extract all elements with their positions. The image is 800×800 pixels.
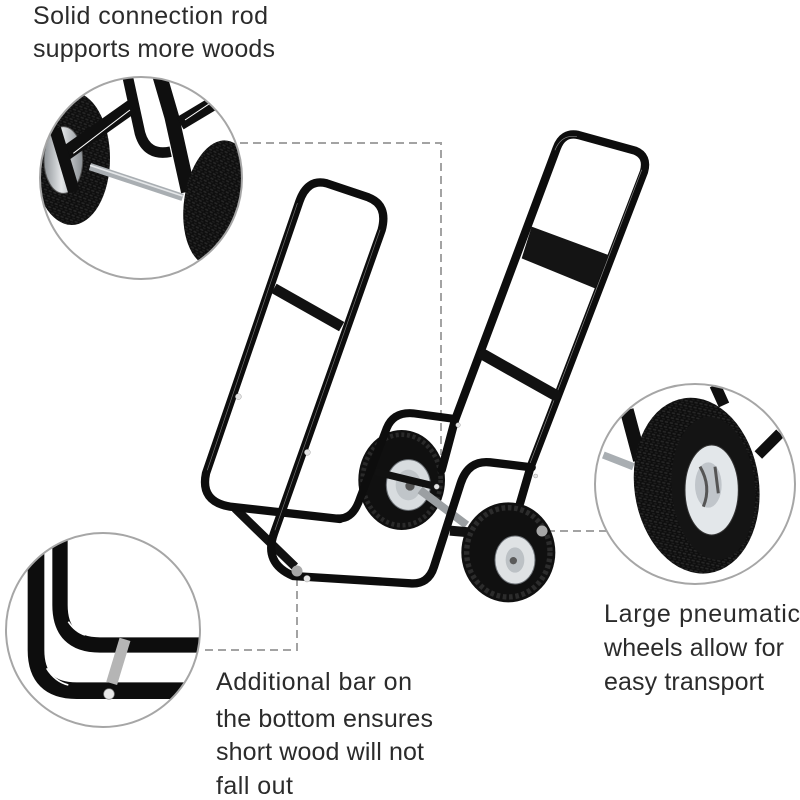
bolt [104,689,114,699]
rear wheel [358,430,445,530]
caption: bottom bar: short wood will not [216,738,424,766]
main product: log cart [205,134,645,602]
caption: connection rod: supports more woods [33,35,275,63]
tube highlights [47,622,85,685]
detail circle outline: connection rod [40,77,242,279]
caption: connection rod [33,2,275,63]
back frame front hoop [337,413,455,518]
connector: bottom dashed leader [200,578,297,650]
caption: pneumatic wheels [603,600,800,696]
detail circle: connection rod [33,77,261,271]
detail circle outline: pneumatic wheel [595,384,795,584]
connection rod [90,167,183,197]
inner tube [60,533,207,645]
caption: bottom bar: fall out [216,772,293,800]
wheel strut [375,472,437,487]
axle support bar [450,531,480,533]
caption: bottom bar: Additional bar on [216,668,412,696]
back frame [442,134,645,503]
frame bars [603,385,780,467]
frame bolts [235,394,538,582]
caption: bottom bar [216,668,433,800]
tire [634,398,760,574]
anchor dot: bottom bar [292,566,302,576]
axle [420,490,467,525]
frame tubes [55,77,213,192]
caption: connection rod: Solid connection rod [33,2,268,30]
anchor dot: wheel [536,526,548,536]
connector: top dashed leader [240,143,441,455]
detail circle: pneumatic wheel [603,385,780,582]
connector: right dashed leader [547,530,606,532]
rear wheel detail [41,96,110,225]
detail circle outline: bottom bar [6,533,200,727]
caption: pneumatic wheels: easy transport [604,668,764,696]
front wheel [461,502,555,602]
additional bar [112,639,125,683]
caption: bottom bar: the bottom ensures [216,705,433,733]
near wheel detail [183,140,241,260]
black padded panel [522,227,608,288]
outer tube [36,550,200,691]
detail circle: bottom bar [36,533,207,699]
diagonal bottom support [235,508,295,567]
caption: pneumatic wheels: wheels allow for [603,634,784,662]
caption: pneumatic wheels: Large pneumatic [604,600,800,628]
hub [685,445,738,535]
front frame [205,182,532,583]
